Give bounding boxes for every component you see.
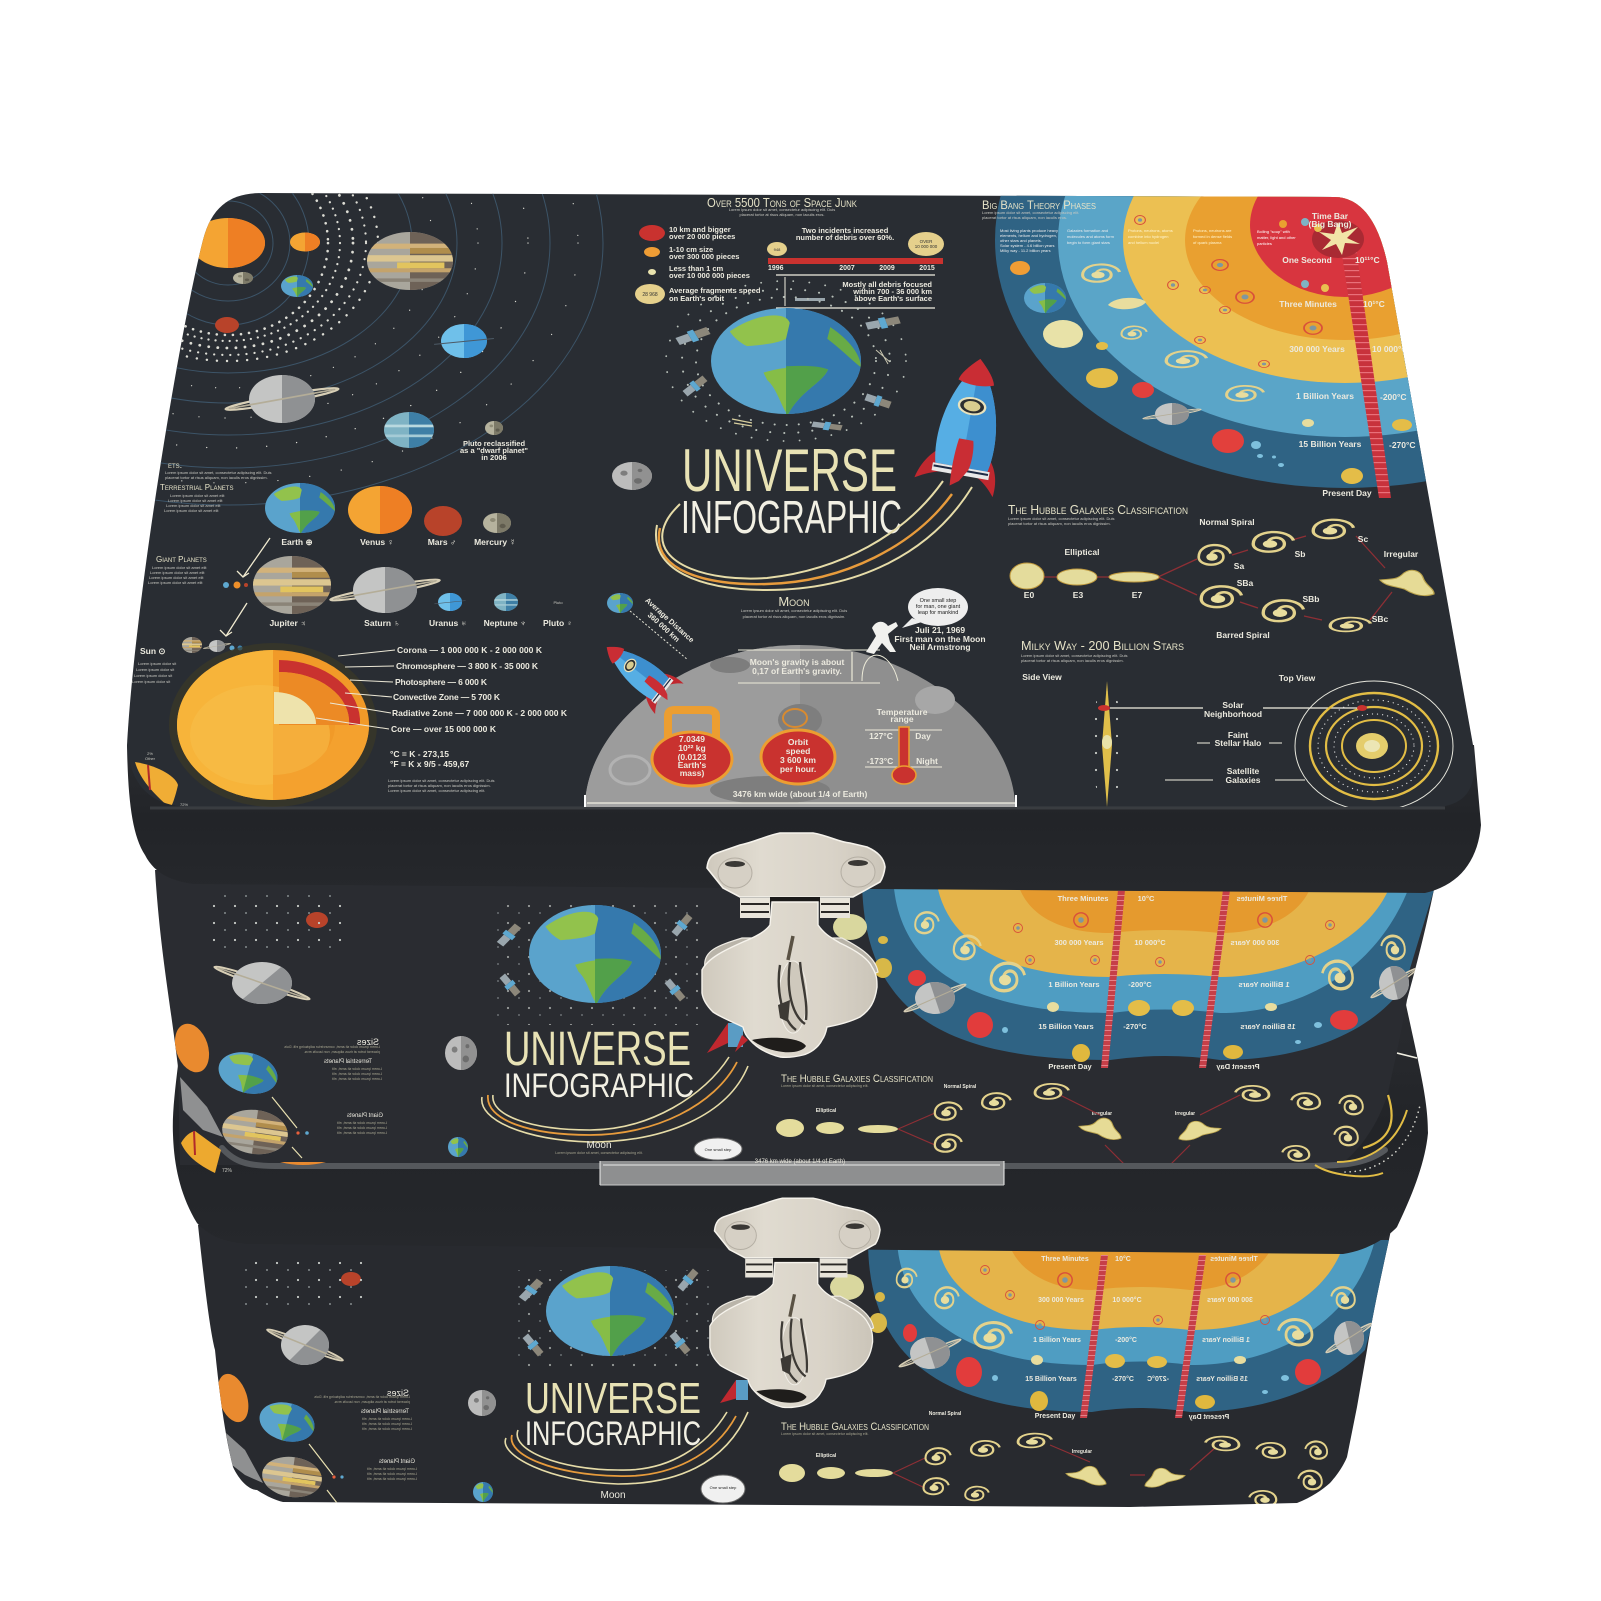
panel: moon section heading: 360 000 km: [646, 610, 682, 644]
lower tin solar system: Lorem ipsum dolor sit amet, elit: [367, 1477, 417, 1481]
upper tin solar system: Lorem ipsum dolor sit amet, consectetur adipiscing elit. Duis: [284, 1045, 380, 1049]
panel: space junk: Two incidents increased: [802, 226, 889, 235]
panel: solar system: [155, 193, 604, 506]
panel: planets sizes: Pluto: [553, 600, 563, 605]
panel: planets sizes: Jupiter ♃: [269, 618, 307, 628]
sun layer labels: °C = K - 273,15: [390, 749, 449, 759]
panel: big bang phases: elements, helium and hydrogen,: [1000, 233, 1057, 238]
title: Universe Infographic: INFOGRAPHIC: [681, 491, 902, 543]
sun layer labels: [316, 645, 568, 793]
panel: milky way: Faint: [1228, 730, 1248, 740]
pie chart: composition: 2%: [147, 751, 153, 756]
panel: planets sizes: Lorem ipsum dolor sit amet elit: [166, 503, 221, 508]
astronaut with speech bubble: for man, one giant: [916, 604, 961, 610]
lower tin title: UNIVERSE: [525, 1374, 701, 1423]
chart: temperature range thermometer: Temperature: [877, 707, 928, 717]
panel: planets sizes: Uranus ♅: [429, 618, 467, 628]
panel: moon section heading: Lorem ipsum dolor sit amet, consectetur adipiscing elit. Duis: [741, 608, 847, 613]
note: Pluto reclassified: in 2006: [481, 453, 507, 462]
panel: planets sizes: Lorem ipsum dolor sit amet elit: [170, 493, 225, 498]
chart: temperature range thermometer: -173°C: [867, 756, 893, 766]
upper tin hubble galaxies: Elliptical: [816, 1108, 837, 1114]
panel: big bang phases: of quark plasma: [1193, 240, 1222, 245]
panel: hubble galaxies classification: Lorem ipsum dolor sit amet, consectetur adipiscing elit. Duis: [1008, 516, 1114, 521]
sun layer labels: Photosphere — 6 000 K: [395, 677, 488, 687]
upper tin labels: Present Day: [1215, 1062, 1260, 1071]
panel: big bang phases: matter, light and other: [1257, 235, 1296, 240]
upper tin hubble galaxies: Lorem ipsum dolor sit amet, consectetur adipiscing elit.: [781, 1084, 868, 1088]
sun layer labels: Lorem ipsum dolor sit amet, consectetur adipiscing elit.: [388, 788, 485, 793]
panel: big bang phases: Boiling "soup" with: [1257, 229, 1290, 234]
panel: milky way: [1021, 638, 1453, 811]
lid latch plate lower tin: [710, 1198, 880, 1408]
panel: hubble galaxies classification: SBc: [1372, 614, 1389, 624]
lower tin labels: -270°C: [1112, 1375, 1134, 1383]
upper tin labels: [1038, 894, 1296, 1071]
panel: planets sizes: Sun ⊙: [140, 646, 166, 656]
panel: planets sizes: Venus ♀: [360, 537, 394, 547]
panel: big bang phases: particles: [1257, 241, 1272, 246]
icon: orbit speed: speed: [786, 746, 810, 756]
upper tin title: One small step: [705, 1147, 732, 1152]
panel: big bang phases: Solar system - 4.6 billion years: [1000, 243, 1054, 248]
lower tin hubble galaxies: Irregular: [1072, 1449, 1092, 1455]
panel: planets sizes: Saturn ♄: [364, 618, 400, 628]
panel: space junk: 2009: [879, 265, 895, 272]
panel: big bang phases: begin to form giant stars: [1067, 240, 1110, 245]
sun layer labels: Corona — 1 000 000 K - 2 000 000 K: [397, 645, 543, 655]
upper tin big bang rings: [833, 889, 1434, 1068]
panel: hubble galaxies classification: E7: [1132, 590, 1142, 600]
panel: space junk: over 20 000 pieces: [669, 232, 735, 241]
big bang labels: Present Day: [1322, 488, 1372, 498]
panel: space junk: over 10 000 000 pieces: [669, 271, 750, 280]
chart: temperature range thermometer: range: [890, 714, 914, 724]
lower tin labels: 15 Billion Years: [1025, 1376, 1077, 1383]
big bang labels: 10 000°C: [1372, 344, 1408, 354]
icon: orbit speed: [761, 709, 835, 784]
lower tin labels: 1 Billion Years: [1202, 1337, 1250, 1344]
lower tin title: INFOGRAPHIC: [525, 1415, 701, 1453]
title: Universe Infographic: UNIVERSE: [682, 437, 897, 504]
panel: hubble galaxies classification: Barred Spiral: [1216, 630, 1270, 640]
panel: space junk: 1-10 cm size: [669, 245, 713, 254]
sun layer labels: placerat tortor at risus aliquam, non iaculis eros dignissim.: [388, 783, 491, 788]
panel: big bang phases: molecules and atoms form: [1067, 234, 1115, 239]
astronaut with speech bubble: First man on the Moon: [894, 634, 986, 644]
lower tin labels: -270°C: [1147, 1375, 1169, 1383]
big bang star and temperature bar: [1312, 220, 1391, 498]
panel: planets sizes: Earth ⊕: [281, 537, 313, 547]
panel: milky way: Side View: [1022, 672, 1062, 682]
panel: moon section heading: [607, 593, 847, 660]
astronaut with speech bubble: [866, 588, 986, 654]
big bang labels: One Second: [1282, 255, 1332, 265]
icon: rocket: [914, 358, 996, 497]
big bang labels: 15 Billion Years: [1299, 439, 1362, 449]
upper tin lid front: [127, 745, 1481, 893]
panel: big bang phases: combine into hydrogen: [1128, 234, 1168, 239]
upper tin solar system: Lorem ipsum dolor sit amet, elit: [337, 1126, 387, 1130]
lower lid silver strip: 3476 km wide (about 1/4 of Earth): [755, 1159, 845, 1165]
lower lid edge details: [180, 1053, 1420, 1185]
lower tin big bang rings: [830, 1240, 1395, 1418]
lower tin title: Moon: [600, 1490, 626, 1501]
upper tin title: [448, 1023, 748, 1160]
lower tin solar system: [212, 1260, 417, 1503]
upper tin solar system: placerat tortor at risus aliquam, non iaculis eros.: [304, 1050, 380, 1054]
upper tin solar system: Terrestrial Planets: [324, 1059, 372, 1065]
lower tin solar system: placerat tortor at risus aliquam, non iaculis eros.: [334, 1400, 410, 1404]
lower tin labels: 1 Billion Years: [1033, 1337, 1081, 1344]
lower tin labels: 300 000 Years: [1038, 1297, 1084, 1304]
panel: space junk: 948: [774, 247, 781, 252]
panel: space junk: Mostly all debris focused: [842, 280, 932, 289]
chart: temperature range thermometer: Day: [915, 731, 931, 741]
upper tin labels: 1 Billion Years: [1238, 980, 1290, 989]
lower tin body: [198, 1225, 1395, 1507]
big bang labels: 10¹°C: [1363, 299, 1385, 309]
rocket swoosh: [656, 481, 972, 590]
sun layer labels: Convective Zone — 5 700 K: [393, 692, 501, 702]
upper tin title: Lorem ipsum dolor sit amet, consectetur adipiscing elit.: [555, 1151, 643, 1155]
lower tin solar system: Lorem ipsum dolor sit amet, elit: [362, 1417, 412, 1421]
lower tin solar system: Lorem ipsum dolor sit amet, elit: [362, 1422, 412, 1426]
upper tin labels: -200°C: [1128, 980, 1152, 989]
lower tin labels: 10 000°C: [1112, 1296, 1142, 1304]
panel: hubble galaxies classification: placerat tortor at risus aliquam, non iaculis eros dignissim.: [1008, 521, 1111, 526]
lower tin lid: [173, 1000, 1428, 1254]
panel: milky way: Neighborhood: [1204, 709, 1262, 719]
lower tin labels: Three Minutes: [1210, 1256, 1258, 1263]
upper tin labels: 10 000°C: [1134, 938, 1166, 947]
panel: big bang phases: Big Bang Theory Phases: [982, 198, 1096, 212]
panel: earth with satellites: [666, 281, 906, 441]
upper tin solar system: Lorem ipsum dolor sit amet, elit: [337, 1131, 387, 1135]
panel: space junk: 2015: [919, 265, 935, 272]
panel: space junk: 10 000 000: [915, 244, 938, 249]
panel: space junk: OVER: [920, 239, 933, 244]
panel: hubble galaxies classification: [1008, 502, 1434, 640]
chart: temperature range thermometer: [865, 707, 942, 784]
lower tin solar system: Terrestrial Planets: [361, 1409, 409, 1415]
photo of two stacked Universe Infographic tins: [127, 193, 1481, 1507]
panel: planets sizes: Lorem ipsum dolor sit: [138, 661, 177, 666]
lower tin solar system: Giant Planets: [379, 1459, 415, 1465]
panel: planets sizes: Mars ♂: [428, 537, 456, 547]
title: Universe Infographic: [684, 448, 901, 534]
astronaut with speech bubble: One small step: [920, 598, 956, 604]
panel: planets sizes: Lorem ipsum dolor sit amet, consectetur adipiscing elit. Duis: [165, 470, 272, 475]
upper tin hubble galaxies: The Hubble Galaxies Classification: [781, 1073, 933, 1085]
upper tin labels: 1 Billion Years: [1048, 980, 1100, 989]
panel: milky way: Solar: [1222, 700, 1244, 710]
lower tin solar system: Lorem ipsum dolor sit amet, elit: [367, 1472, 417, 1476]
upper tin solar system: Lorem ipsum dolor sit amet, elit: [337, 1121, 387, 1125]
panel: big bang phases: other stars and planets.: [1000, 238, 1042, 243]
panel: milky way: Satellite: [1227, 766, 1260, 776]
lower tin labels: Three Minutes: [1041, 1256, 1089, 1263]
lower lid highlight band: [222, 1148, 1385, 1166]
panel: planets sizes: Lorem ipsum dolor sit: [134, 673, 173, 678]
lower tin hubble galaxies: [779, 1411, 1327, 1506]
upper tin hubble galaxies: Irregular: [1092, 1111, 1112, 1117]
note: Pluto reclassified: Pluto reclassified: [463, 439, 525, 448]
panel: hubble galaxies classification: SBa: [1237, 578, 1254, 588]
icon: moon mass weight: (0.0123: [678, 752, 707, 762]
upper tin title: Moon: [586, 1140, 612, 1151]
panel: moon section heading: Average Distance: [643, 596, 696, 644]
milky way side view: [1092, 681, 1122, 807]
panel: planets sizes: Lorem ipsum dolor sit amet elit: [152, 565, 207, 570]
lower tin earth with satellites: [468, 1266, 710, 1502]
panel: hubble galaxies classification: Normal Spiral: [1199, 517, 1255, 527]
panel: milky way: Milky Way - 200 Billion Stars: [1021, 638, 1184, 653]
big bang labels: 300 000 Years: [1289, 344, 1345, 354]
panel: space junk: 28 968: [642, 292, 658, 298]
panel: hubble galaxies classification: Elliptical: [1065, 547, 1099, 557]
panel: planets sizes: Giant Planets: [156, 555, 207, 564]
panel: space junk: over 300 000 pieces: [669, 252, 739, 261]
panel: space junk: 10 km and bigger: [669, 225, 731, 234]
upper tin hubble galaxies: Irregular: [1175, 1111, 1195, 1117]
panel: space junk: 2007: [839, 265, 855, 272]
sun layer labels: °F = K x 9/5 - 459,67: [390, 759, 470, 769]
panel: planets sizes: Terrestrial Planets: [160, 483, 233, 492]
upper tin solar system: Giant Planets: [347, 1113, 383, 1119]
big bang labels: Time Bar: [1312, 211, 1349, 221]
panel: space junk: within 700 - 36 000 km: [852, 287, 932, 296]
big bang labels: -200°C: [1380, 392, 1407, 402]
lid latch plate upper tin: [702, 833, 885, 1057]
icon: moon mass weight: [652, 710, 732, 786]
panel: hubble galaxies classification: E0: [1024, 590, 1034, 600]
panel: big bang phases: placerat tortor at risus aliquam, non iaculis eros.: [982, 215, 1067, 220]
upper tin labels: 10°C: [1138, 894, 1155, 903]
panel: planets sizes: ets.: [168, 460, 182, 470]
sun layer labels: Lorem ipsum dolor sit amet, consectetur adipiscing elit. Duis: [388, 778, 494, 783]
upper tin labels: 300 000 Years: [1230, 938, 1280, 947]
panel: sun cross-section: [169, 643, 377, 807]
panel: big bang phases: Lorem ipsum dolor sit amet, consectetur adipiscing elit.: [982, 210, 1079, 215]
big bang labels: 1 Billion Years: [1296, 391, 1354, 401]
upper tin labels: Three Minutes: [1058, 894, 1108, 903]
panel: space junk: Lorem ipsum dolor sit amet, consectetur adipiscing elit. Duis: [729, 207, 835, 212]
sun layer labels: Radiative Zone — 7 000 000 K - 2 000 000 K: [392, 708, 568, 718]
lower tin labels: 10°C: [1115, 1255, 1131, 1263]
lower tin hubble galaxies: Elliptical: [816, 1453, 837, 1459]
panel: hubble galaxies classification: Sa: [1234, 561, 1244, 571]
panel: hubble galaxies classification: E3: [1073, 590, 1083, 600]
panel: hubble galaxies classification: Irregular: [1384, 549, 1419, 559]
note: Pluto reclassified: [460, 440, 528, 460]
lower tin title: [505, 1374, 748, 1503]
icon: orbit speed: per hour.: [780, 764, 816, 774]
panel: big bang phases: Most living plants produce heavy: [1000, 228, 1058, 233]
chart: temperature range thermometer: 127°C: [869, 731, 893, 741]
panel: space junk: [635, 195, 944, 308]
panel: planets sizes: [132, 460, 573, 684]
panel: planets sizes: Mercury ☿: [474, 537, 516, 547]
panel: space junk: Less than 1 cm: [669, 264, 724, 273]
panel: planets sizes: Lorem ipsum dolor sit amet elit: [164, 508, 219, 513]
upper tin labels: 15 Billion Years: [1240, 1022, 1296, 1031]
lower tin solar system: Lorem ipsum dolor sit amet, elit: [362, 1427, 412, 1431]
upper tin earth with satellites: [445, 905, 700, 1070]
upper tin solar system: Lorem ipsum dolor sit amet, elit: [332, 1067, 382, 1071]
lower lid right corner milky way: [1315, 1053, 1420, 1176]
lower tin labels: 300 000 Years: [1207, 1297, 1253, 1304]
lower tin title: One small step: [710, 1485, 737, 1490]
panel: milky way: placerat tortor at risus aliquam, non iaculis eros dignissim.: [1021, 658, 1124, 663]
upper tin hubble galaxies: [776, 1073, 1363, 1165]
upper tin solar system: Lorem ipsum dolor sit amet, elit: [332, 1072, 382, 1076]
lower lid left corner artwork: 72%: [222, 1168, 233, 1174]
big bang labels: Three Minutes: [1279, 299, 1337, 309]
lower lid silver strip: [600, 1159, 1004, 1185]
astronaut with speech bubble: Juli 21, 1969: [915, 625, 965, 635]
upper tin solar system: [169, 895, 387, 1158]
note: Pluto reclassified: as a "dwarf planet": [460, 446, 528, 455]
icon: moon mass weight: 7.0349: [679, 734, 705, 744]
upper tin labels: Present Day: [1048, 1062, 1093, 1071]
panel: big bang phases: [982, 196, 1426, 498]
upper tin hubble galaxies: Normal Spiral: [944, 1084, 977, 1090]
icon: moon mass weight: Earth's: [678, 760, 707, 770]
sun layer labels: Chromosphere — 3 800 K - 35 000 K: [396, 661, 539, 671]
astronaut with speech bubble: leap for mankind: [918, 610, 958, 616]
panel: planets sizes: Neptune ♆: [484, 618, 526, 628]
panel: big bang phases: formed in dense fields: [1193, 234, 1232, 239]
pie chart: composition: [135, 751, 188, 808]
panel: hubble galaxies classification: Sc: [1358, 534, 1368, 544]
icon: small rocket: [606, 646, 684, 714]
panel: hubble galaxies classification: Sb: [1295, 549, 1305, 559]
big bang labels: (Big Bang): [1309, 219, 1352, 229]
lower tin labels: -200°C: [1115, 1336, 1137, 1344]
panel: big bang phases: and helium nuclei: [1128, 240, 1159, 245]
panel: milky way: Stellar Halo: [1215, 738, 1261, 748]
panel: planets sizes: Pluto ♇: [543, 618, 573, 628]
lower lid left corner artwork: [180, 1077, 326, 1174]
upper tin solar system: Lorem ipsum dolor sit amet, elit: [332, 1077, 382, 1081]
panel: planets sizes: Lorem ipsum dolor sit amet elit: [149, 575, 204, 580]
big bang labels: [1279, 211, 1416, 498]
panel: planets sizes: Lorem ipsum dolor sit amet elit: [150, 570, 205, 575]
big bang ring objects: [1010, 216, 1412, 484]
upper tin labels: 15 Billion Years: [1038, 1022, 1094, 1031]
upper tin labels: -270°C: [1123, 1022, 1147, 1031]
panel: space junk: on Earth's orbit: [669, 294, 725, 303]
lower tin labels: Present Day: [1189, 1414, 1229, 1421]
milky way top view spiral: [1295, 681, 1453, 811]
lower tin labels: Present Day: [1035, 1413, 1075, 1420]
panel: milky way: Galaxies: [1226, 775, 1261, 785]
panel: space junk: above Earth's surface: [854, 294, 932, 303]
panel: moon dome: 0,17 of Earth's gravity.: [752, 666, 842, 676]
sun layer labels: Core — over 15 000 000 K: [391, 724, 497, 734]
icon: orbit speed: Orbit: [788, 737, 808, 747]
icon: moon mass weight: mass): [680, 768, 704, 778]
icon: small moon: [612, 462, 652, 490]
panel: big bang phases: Milky way - 11.2 billion years: [1000, 248, 1051, 253]
upper tin labels: 300 000 Years: [1054, 938, 1104, 947]
lower tin solar system: Sizes: [386, 1388, 409, 1398]
panel: big bang phases: Protons, neutrons are: [1193, 228, 1232, 233]
upper tin solar system: Sizes: [356, 1037, 379, 1047]
panel: hubble galaxies classification: SBb: [1302, 594, 1320, 604]
panel: space junk: placerat tortor at risus aliquam, non iaculis eros.: [740, 212, 824, 217]
arrows between planets: [220, 538, 270, 636]
big bang labels: 10¹¹°C: [1355, 255, 1380, 265]
panel: moon dome: Moon's gravity is about: [750, 657, 844, 667]
pie chart: composition: Other: [145, 756, 156, 761]
panel: milky way: Lorem ipsum dolor sit amet, consectetur adipiscing elit. Duis: [1021, 653, 1128, 658]
upper tin labels: Three Minutes: [1237, 894, 1287, 903]
panel: hubble galaxies classification: The Hubble Galaxies Classification: [1008, 502, 1188, 517]
chart: temperature range thermometer: Night: [916, 756, 938, 766]
lower tin solar system: Lorem ipsum dolor sit amet, elit: [367, 1467, 417, 1471]
lower tin labels: 15 Billion Years: [1196, 1376, 1248, 1383]
lower tin solar system: Lorem ipsum dolor sit amet, consectetur adipiscing elit. Duis: [314, 1395, 410, 1399]
panel: big bang phases: Galaxies formation and: [1067, 228, 1108, 233]
upper tin title: UNIVERSE: [504, 1023, 691, 1076]
panel: planets sizes: placerat tortor at risus aliquam, non iaculis eros dignissim.: [165, 475, 268, 480]
panel: moon section heading: Moon: [778, 594, 810, 609]
upper tin body: [155, 870, 1440, 1165]
upper lid top face: [127, 193, 1473, 810]
lower tin hubble galaxies: Normal Spiral: [929, 1411, 962, 1417]
pie chart: composition: 72%: [180, 802, 188, 807]
panel: big bang phases: Protons, neutrons, atoms: [1128, 228, 1173, 233]
panel: moon dome: 3476 km wide (about 1/4 of Earth): [733, 789, 867, 799]
panel: space junk: 1996: [768, 265, 784, 272]
upper tin title: INFOGRAPHIC: [504, 1067, 694, 1105]
panel: moon section heading: placerat tortor at risus aliquam, non iaculis eros dignissim.: [743, 614, 845, 619]
lower tin hubble galaxies: The Hubble Galaxies Classification: [781, 1421, 929, 1433]
astronaut with speech bubble: Neil Armstrong: [909, 642, 971, 652]
panel: planets sizes: Lorem ipsum dolor sit: [132, 679, 171, 684]
icon: orbit speed: 3 600 km: [780, 755, 816, 765]
panel: space junk: number of debris over 60%.: [796, 233, 894, 242]
lower tin hubble galaxies: Lorem ipsum dolor sit amet, consectetur adipiscing elit.: [781, 1432, 868, 1436]
panel: space junk: Over 5500 Tons of Space Junk: [707, 195, 857, 210]
lower tin labels: [1025, 1255, 1258, 1421]
icon: moon mass weight: 10²² kg: [678, 743, 706, 753]
panel: moon dome: [585, 645, 1016, 818]
big bang labels: -270°C: [1389, 440, 1416, 450]
panel: planets sizes: Lorem ipsum dolor sit amet elit: [168, 498, 223, 503]
panel: planets sizes: Lorem ipsum dolor sit: [136, 667, 175, 672]
panel: milky way: Top View: [1279, 673, 1316, 683]
panel: space junk: Average fragments speed: [669, 286, 761, 295]
panel: planets sizes: Lorem ipsum dolor sit amet elit: [148, 580, 203, 585]
